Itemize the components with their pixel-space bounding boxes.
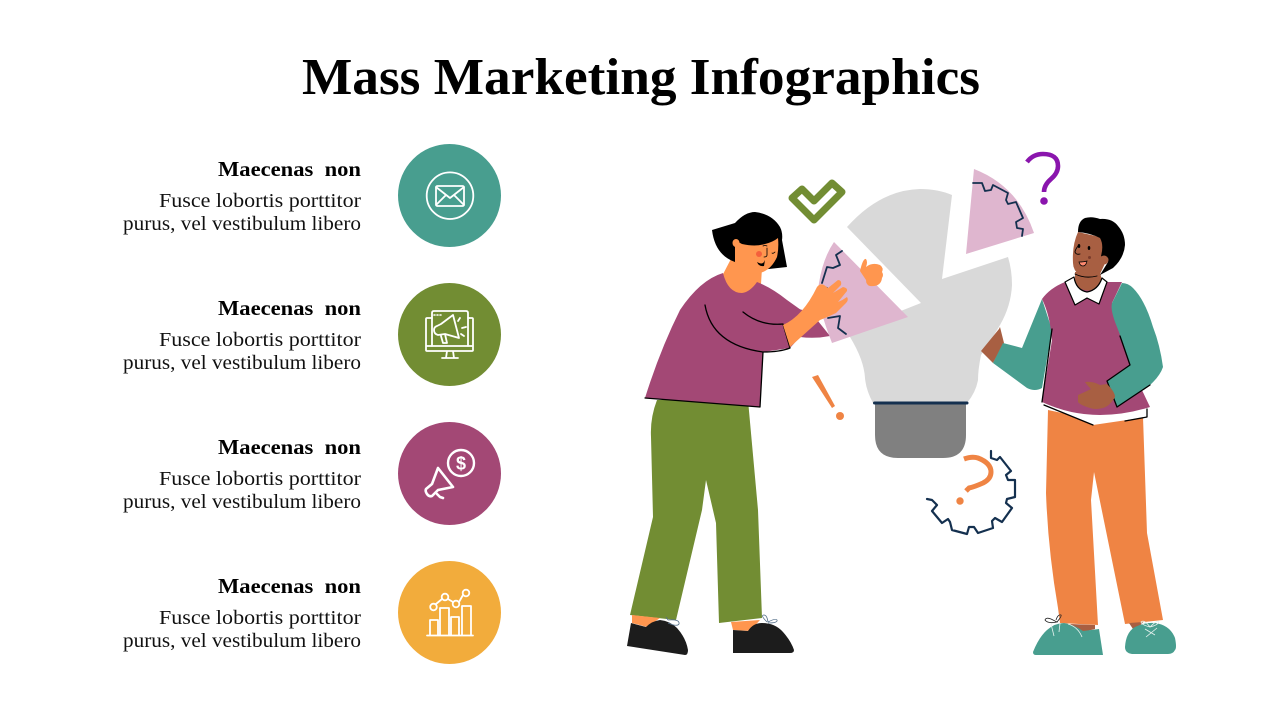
shirt hem [1044,405,1147,425]
bulb glass [847,189,1012,403]
panel: item 2 [123,283,501,386]
text block [123,329,361,374]
heading: Maecenas non [218,435,361,459]
right sleeve [1107,283,1163,407]
trousers [630,400,762,623]
icon: check mark [792,183,842,220]
hair back [712,212,787,270]
icon: bar chart with line [398,561,501,664]
bulb [847,169,1034,458]
shirt [645,273,815,407]
hair [1078,217,1125,275]
icon: monitor with megaphone [398,283,501,386]
vest outlines [1042,329,1150,407]
bulb base [875,404,966,458]
facial details [1075,244,1097,277]
left sleeve [993,299,1052,390]
woman [627,212,908,655]
icon: envelope [398,144,501,247]
text block: purus, vel vestibulum libero [123,630,361,652]
title: Mass Marketing Infographics [302,49,980,106]
text block [123,607,361,652]
icon: megaphone and dollar coin: $ [456,454,466,474]
icon: gear with question mark [927,451,1015,534]
icon: purple question mark [1027,154,1058,205]
pie slice held by woman [818,242,908,343]
illustration: marketing scene [627,154,1176,655]
upper pie slice [966,169,1034,254]
left hand [981,327,1004,363]
text block: purus, vel vestibulum libero [123,491,361,513]
head [1073,232,1108,277]
face [735,238,778,274]
arm and hand [783,280,848,347]
shoes [627,615,794,655]
text block: Fusce lobortis porttitor [159,190,361,212]
man [981,217,1176,655]
panel: item 4 [123,561,501,664]
trousers [1046,410,1163,625]
far sleeve [780,300,830,338]
heading: Maecenas non [218,157,361,181]
neck [720,255,762,300]
text block [123,190,361,235]
icon: exclamation mark [812,375,844,420]
shirt outlines [645,305,790,407]
icon: megaphone and dollar coin [398,422,501,525]
text block: purus, vel vestibulum libero [123,213,361,235]
text block: purus, vel vestibulum libero [123,352,361,374]
heading: Maecenas non [218,574,361,598]
socks [632,615,760,631]
panel: item 1 [123,144,501,247]
bulb collar line [874,402,967,404]
ear [1100,256,1108,264]
panel: item 3 [123,422,501,525]
neck [1075,272,1103,290]
text block: Fusce lobortis porttitor [159,607,361,629]
text block [123,468,361,513]
shoes [1033,615,1176,655]
fist [860,259,883,286]
heading: Maecenas non [218,296,361,320]
facial details [732,239,775,266]
right hand [1078,382,1115,409]
collar [1065,277,1107,305]
ankles [1070,622,1143,632]
vest [1042,282,1150,415]
text block: Fusce lobortis porttitor [159,468,361,490]
text block: Fusce lobortis porttitor [159,329,361,351]
